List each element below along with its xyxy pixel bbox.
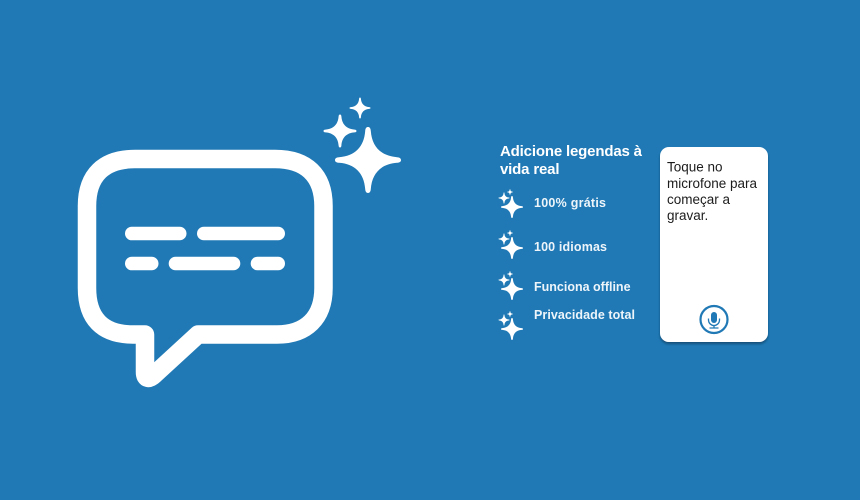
- feature: Privacidade total: [498, 308, 635, 340]
- heading: [500, 143, 643, 178]
- icon: large sparkles: [324, 98, 401, 193]
- icon: speech bubble: [87, 159, 324, 378]
- feature: 100% grátis: 100% grátis: [534, 196, 606, 210]
- card text: gravar.: [667, 208, 708, 223]
- feature: 100 idiomas: 100 idiomas: [534, 240, 607, 254]
- card text: microfone para: [667, 176, 758, 191]
- heading: Adicione legendas à: [500, 143, 643, 160]
- card text: Toque no: [667, 160, 723, 174]
- feature: 100 idiomas: [498, 230, 607, 259]
- panel: phone card: [660, 147, 768, 342]
- feature: Funciona offline: [498, 271, 631, 300]
- feature: Privacidade total: Privacidade total: [534, 308, 635, 322]
- heading: vida real: [500, 161, 560, 178]
- feature: 100% grátis: [498, 189, 606, 218]
- icon: microphone button: [700, 306, 728, 333]
- feature: Funciona offline: Funciona offline: [534, 280, 631, 294]
- card text: começar a: [667, 192, 731, 207]
